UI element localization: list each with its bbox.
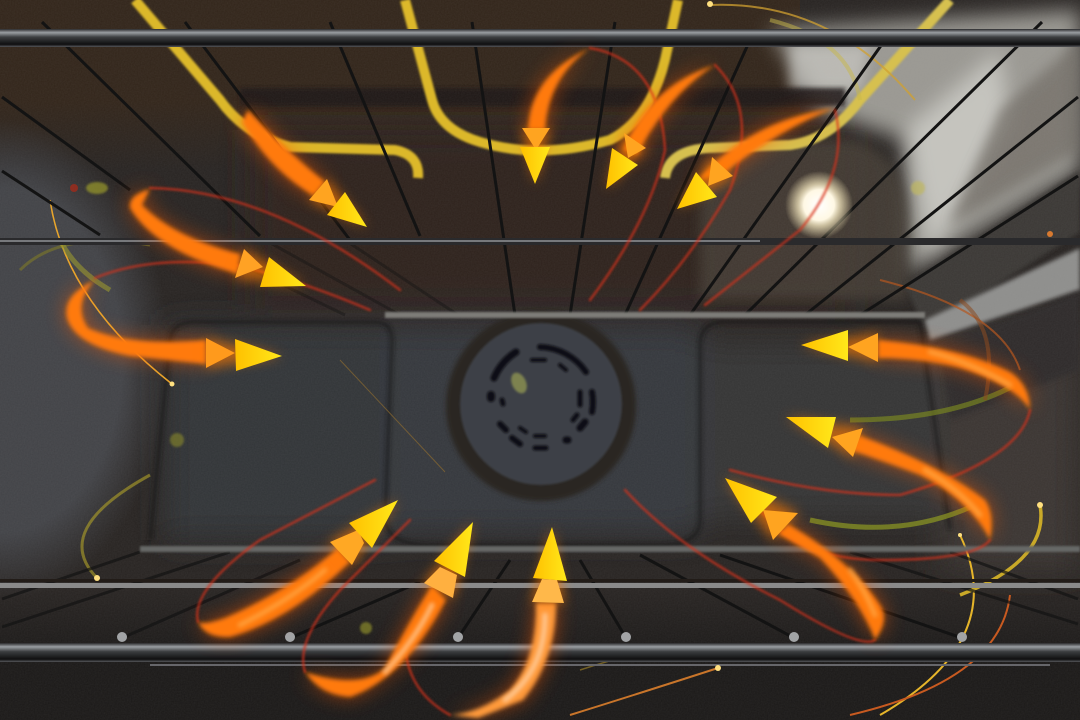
top heating element [135,0,950,178]
back wall panels [150,322,950,545]
arrow: mid left [206,338,282,371]
arrow: upper left [235,249,306,287]
arrow: bottom centre [532,527,567,603]
arrow: top right [677,157,733,209]
arrow: top centre [520,128,550,184]
bright flare [785,171,853,239]
swirl highlights [240,352,1010,700]
airflow arrows [206,128,878,603]
arrow: bottom middle [424,522,473,598]
dark back roof band [240,88,845,106]
side rails [905,170,1080,330]
oven rack: lower [0,546,1080,666]
arrow: right middle [786,417,863,457]
arrow glow [206,128,878,603]
arrow: top left [309,179,367,227]
bright side wall [770,10,1080,275]
arrow: bottom left [330,500,398,565]
rear fan cover [446,311,636,501]
oven rack: upper [0,22,1080,318]
dark arch behind flare [700,140,908,300]
arrow: right lower [725,478,798,540]
arrow: top centre right [606,133,646,189]
arrow: right upper [801,330,878,362]
